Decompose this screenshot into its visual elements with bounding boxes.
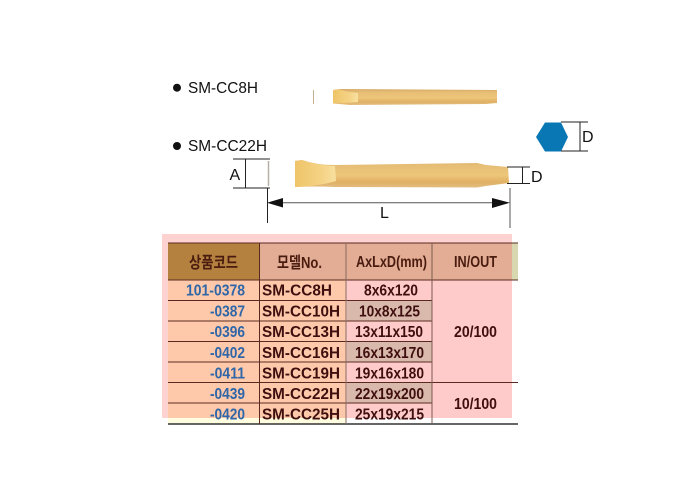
product codes: -0387 bbox=[210, 304, 245, 320]
product codes: 101-0378 bbox=[186, 282, 245, 300]
model numbers: SM-CC13H bbox=[262, 324, 340, 341]
icon: hexagon cross-section with D: D bbox=[582, 129, 594, 146]
in/out column bbox=[454, 324, 497, 413]
table grid lines bbox=[168, 243, 518, 424]
model numbers: SM-CC25H bbox=[262, 406, 340, 424]
chisel: SM-CC22H bbox=[295, 160, 509, 188]
dimensions column: 25x19x215 bbox=[355, 406, 424, 424]
dimensions column: 19x16x180 bbox=[355, 366, 424, 382]
dimensions column bbox=[355, 282, 424, 424]
model numbers: SM-CC8H bbox=[262, 282, 332, 300]
product codes: -0402 bbox=[210, 345, 245, 362]
dimension: A bbox=[230, 159, 270, 188]
icon: hexagon cross-section with D bbox=[536, 122, 594, 152]
dimensions column: 10x8x125 bbox=[359, 304, 420, 320]
dimension: L: L bbox=[380, 205, 389, 222]
table header row: IN/OUT bbox=[454, 254, 497, 271]
model numbers: SM-CC22H bbox=[262, 386, 340, 403]
table bbox=[162, 234, 518, 424]
dimensions column: 8x6x120 bbox=[364, 282, 418, 300]
table header row: AxLxD(mm) bbox=[356, 254, 427, 271]
table body backgrounds bbox=[162, 234, 512, 424]
chisel: SM-CC8H bbox=[313, 89, 497, 105]
product codes: -0420 bbox=[210, 406, 245, 424]
product codes: -0411 bbox=[210, 366, 245, 382]
label: SM-CC8H: SM-CC8H bbox=[188, 80, 258, 97]
dimension: D at chisel end bbox=[507, 167, 543, 186]
dimensions column: 16x13x170 bbox=[355, 345, 424, 362]
table header row: 상품코드 bbox=[189, 254, 238, 272]
table header row: 모델No. bbox=[277, 254, 322, 272]
in/out column: 20/100 bbox=[454, 324, 497, 341]
model numbers: SM-CC10H bbox=[262, 304, 340, 320]
product codes bbox=[186, 282, 245, 424]
product codes: -0396 bbox=[210, 324, 245, 341]
dimensions column: 22x19x200 bbox=[355, 386, 424, 403]
model numbers bbox=[262, 282, 340, 424]
model numbers: SM-CC16H bbox=[262, 345, 340, 362]
dimension: A: A bbox=[230, 167, 240, 184]
dimensions column: 13x11x150 bbox=[355, 324, 423, 341]
model numbers: SM-CC19H bbox=[262, 366, 340, 382]
dimension: D at chisel end: D bbox=[531, 169, 543, 186]
dimension: L bbox=[267, 188, 510, 228]
in/out column: 10/100 bbox=[454, 396, 497, 413]
product codes: -0439 bbox=[210, 386, 245, 403]
table header row bbox=[168, 243, 518, 280]
label: SM-CC22H: SM-CC22H bbox=[188, 138, 267, 155]
